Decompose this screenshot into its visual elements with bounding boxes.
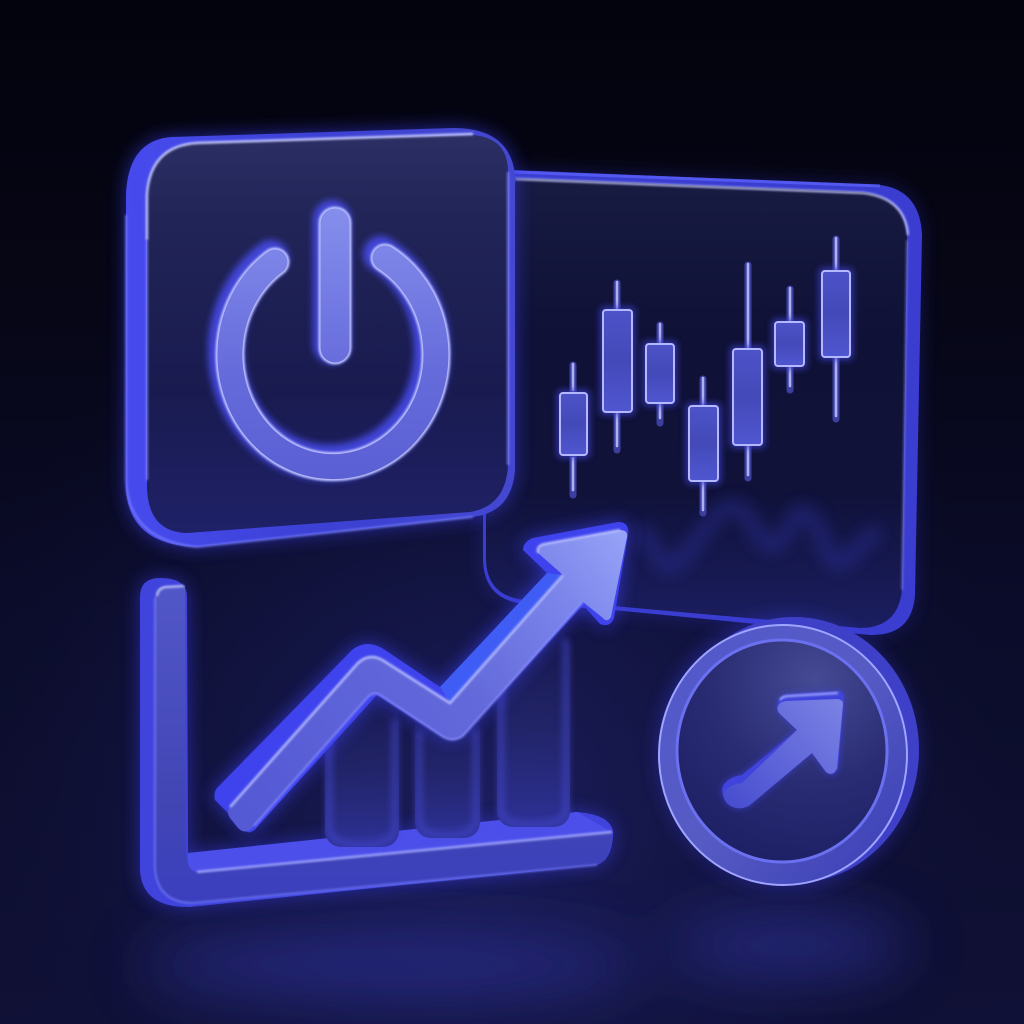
icon: round arrow badge xyxy=(658,617,919,887)
faint line trace xyxy=(640,506,880,566)
chart: axes and bars xyxy=(140,578,613,907)
wick halos xyxy=(573,239,836,513)
panel: power tile xyxy=(126,128,515,547)
badge back rim xyxy=(669,617,919,883)
badge face xyxy=(677,640,887,862)
arrow in badge xyxy=(722,691,844,808)
icon: power symbol xyxy=(226,200,436,467)
arrow: rising trend xyxy=(214,522,628,832)
wicks xyxy=(573,238,836,510)
axes xyxy=(140,578,613,907)
candlesticks xyxy=(557,238,853,513)
bars xyxy=(325,630,570,847)
badge front ring xyxy=(659,625,907,885)
panel: candlestick chart xyxy=(483,170,922,635)
floor reflection xyxy=(140,915,910,997)
candle bodies halo xyxy=(557,268,853,484)
candle bodies xyxy=(560,271,850,481)
